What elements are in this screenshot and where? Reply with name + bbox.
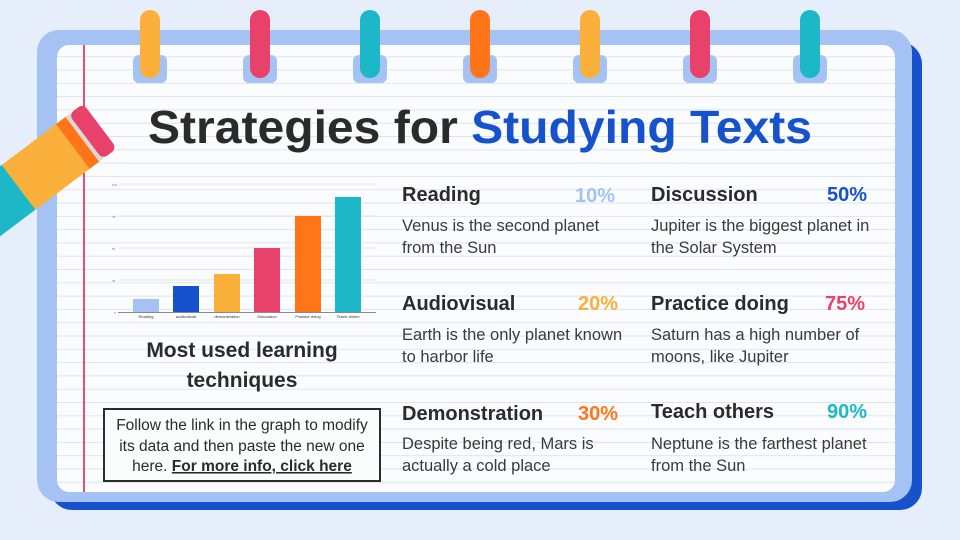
rings [133,10,827,83]
item: teach others: from the Sun [651,457,745,475]
item: teach others: Neptune is the farthest planet [651,435,867,453]
bar chart: Discussion [257,314,277,319]
bar chart: 75 [112,215,116,219]
note box [104,409,380,481]
bar chart: Teach others [337,314,359,319]
item: reading: 10% [575,185,615,207]
item: demonstration: 30% [578,403,618,425]
bar chart: audiovisual [176,314,196,319]
note box: here. For more info, click here [132,458,352,475]
item: practice doing: 75% [825,293,865,315]
item: teach others [651,401,867,475]
item: practice doing: moons, like Jupiter [651,348,789,366]
item: audiovisual: Audiovisual [402,293,515,315]
item: demonstration: actually a cold place [402,457,551,475]
note box: Follow the link in the graph to modify [116,417,368,434]
bar chart: demonstration [214,314,240,319]
icon: pencil [0,104,117,245]
item: practice doing [651,293,865,366]
bar chart: Reading [139,314,153,319]
item: demonstration: Despite being red, Mars is [402,435,594,453]
note box: its data and then paste the new one [119,438,365,455]
item: audiovisual: 20% [578,293,618,315]
item: discussion: 50% [827,184,867,206]
item: teach others: 90% [827,401,867,423]
item: reading: Venus is the second planet [402,217,599,235]
item: practice doing: Saturn has a high number of [651,326,859,344]
bar chart: 100 [112,183,117,187]
item: reading: from the Sun [402,239,496,257]
item: practice doing: Practice doing [651,293,789,315]
chart caption: techniques [187,369,297,392]
bar chart [112,183,376,319]
item: discussion: Jupiter is the biggest planet in [651,217,869,235]
item: audiovisual: to harbor life [402,348,494,366]
item: demonstration [402,403,618,475]
item: discussion: the Solar System [651,239,777,257]
item: teach others: Teach others [651,401,774,423]
item: reading [402,184,615,257]
bar chart: Practice doing [295,314,321,319]
item: audiovisual [402,293,622,366]
item: audiovisual: Earth is the only planet known [402,326,622,344]
item: demonstration: Demonstration [402,403,543,425]
item: discussion [651,184,869,257]
bar chart: 50 [112,247,116,251]
item: reading: Reading [402,184,481,206]
bar chart: 25 [112,279,116,283]
title: Strategies for Studying Texts [148,101,812,153]
bar chart: 0 [114,311,116,315]
item: discussion: Discussion [651,184,758,206]
chart caption: Most used learning [146,339,338,362]
